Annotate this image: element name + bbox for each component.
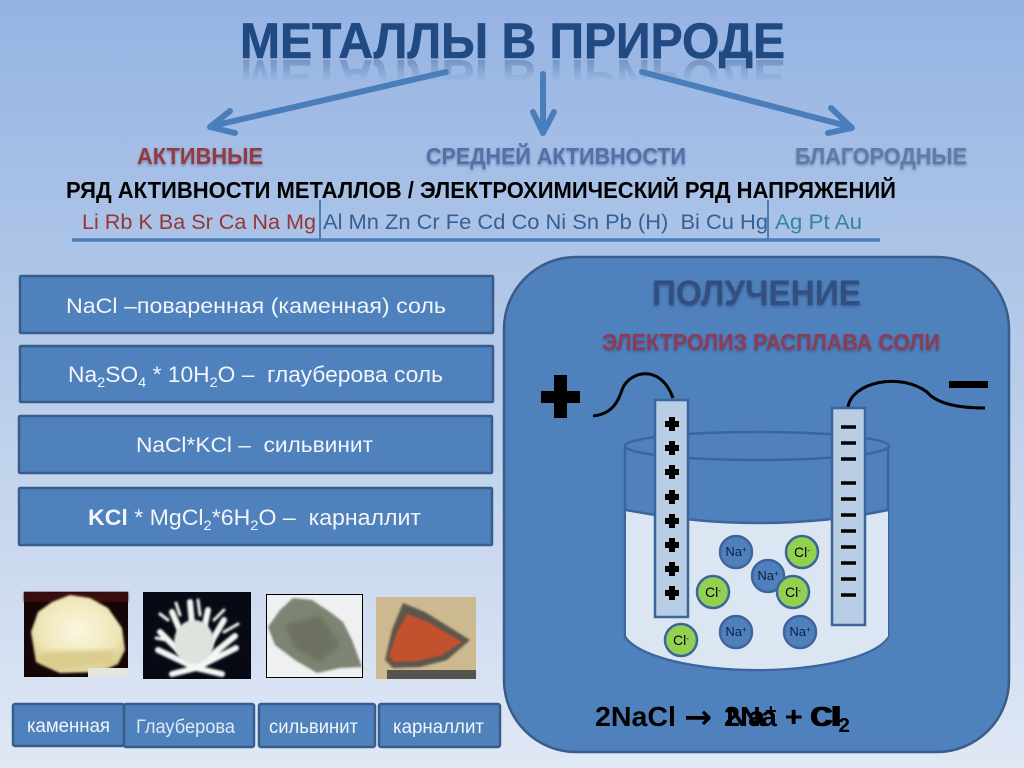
salt box: Glauber's salt xyxy=(20,346,493,402)
overlapping reaction equations xyxy=(595,698,850,737)
mineral label: sylvinite xyxy=(259,704,375,747)
salt box: carnallite: O – карналлит xyxy=(258,505,421,530)
cathode electrode xyxy=(832,408,865,625)
ion: chloride centre: Cl xyxy=(785,584,798,600)
anode electrode xyxy=(655,400,688,617)
ion: chloride: - xyxy=(807,546,810,555)
ion: sodium: + xyxy=(742,545,747,554)
ion: chloride left: - xyxy=(718,586,721,595)
salt box: rock salt: NaCl –поваренная (каменная) соль xyxy=(66,294,446,318)
salt box: Glauber's salt: * 10H xyxy=(146,362,210,387)
overlapping reaction equations: 2 xyxy=(839,715,850,737)
salt box: Glauber's salt: 2 xyxy=(97,374,105,390)
overlapping reaction equations: 2NaCl xyxy=(595,701,676,732)
heading: noble metals: БЛАГОРОДНЫЕ xyxy=(795,143,967,169)
ion: chloride bottom: Cl xyxy=(673,632,686,648)
salt box: Glauber's salt: SO xyxy=(105,362,138,387)
overlapping reaction equations: → xyxy=(684,698,712,736)
ion: sodium bottom right: + xyxy=(806,625,811,634)
mineral label: rock salt xyxy=(13,704,124,746)
ion: chloride: Cl xyxy=(794,544,807,560)
mineral label: sylvinite: сильвинит xyxy=(269,717,358,738)
ion: chloride xyxy=(786,536,818,568)
title: МЕТАЛЛЫ В ПРИРОДЕ xyxy=(240,13,785,69)
heading: medium activity metals: СРЕДНЕЙ АКТИВНОСТИ xyxy=(426,142,686,169)
panel: production by electrolysis xyxy=(504,257,1009,752)
salt box: sylvinite: NaCl*KCl – сильвинит xyxy=(136,433,373,457)
photo: rock salt xyxy=(24,592,128,677)
ion: sodium centre: Na xyxy=(757,568,774,583)
arrow: to noble metals xyxy=(642,72,852,133)
overlapping reaction equations: Na xyxy=(726,701,762,732)
mineral label: rock salt: каменная xyxy=(27,716,110,737)
ion: chloride left: Cl xyxy=(705,584,718,600)
salt box: Glauber's salt: O – глауберова соль xyxy=(218,362,443,387)
ion: sodium bottom left: + xyxy=(742,625,747,634)
salt box: sylvinite xyxy=(19,416,492,473)
activity series of metals: Li Rb K Ba Sr Ca Na Mg xyxy=(82,210,316,234)
photo: sylvinite xyxy=(266,594,362,678)
activity series of metals: Al Mn Zn Cr Fe Cd Co Ni Sn Pb (H) Bi Cu Hg xyxy=(323,210,768,234)
salt box: carnallite: 2 xyxy=(204,517,212,533)
salt box: Glauber's salt: 2 xyxy=(210,374,218,390)
wire: anode xyxy=(593,374,673,416)
salt box: Glauber's salt: 4 xyxy=(138,374,146,390)
overlapping reaction equations: + Cl xyxy=(777,701,842,732)
activity series of metals: Ag Pt Au xyxy=(775,210,862,234)
mineral label: carnallite xyxy=(379,704,500,747)
overlapping reaction equations: + xyxy=(765,701,777,721)
ion: chloride left xyxy=(697,576,729,608)
overlapping reaction equations: 2Na + Cl xyxy=(724,701,835,732)
ion: chloride bottom xyxy=(665,624,697,656)
arrow: to medium-activity metals xyxy=(533,74,554,133)
subheading: molten salt electrolysis: ЭЛЕКТРОЛИЗ РАСПЛАВА СОЛИ xyxy=(602,329,940,355)
title: МЕТАЛЛЫ В ПРИРОДЕ xyxy=(240,49,785,105)
beaker xyxy=(625,432,889,670)
ion: sodium bottom left xyxy=(720,616,752,648)
salt box: carnallite: *6H xyxy=(212,505,250,530)
ion: chloride centre xyxy=(777,576,809,608)
ion: chloride centre: - xyxy=(798,586,801,595)
salt box: carnallite xyxy=(19,488,492,545)
ion: sodium bottom right xyxy=(784,616,816,648)
ion: sodium: Na xyxy=(725,544,742,559)
ion: sodium bottom right: Na xyxy=(789,624,806,639)
salt box: carnallite: KCl * MgCl xyxy=(88,505,200,530)
heading: activity series: РЯД АКТИВНОСТИ МЕТАЛЛОВ / ЭЛЕКТРОХИМИЧЕСКИЙ РЯД НАПРЯЖЕНИЙ xyxy=(66,176,896,203)
ion: sodium centre: + xyxy=(774,569,779,578)
salt box: rock salt xyxy=(20,276,493,333)
mineral label: carnallite: карналлит xyxy=(393,717,484,738)
heading: active metals: АКТИВНЫЕ xyxy=(137,143,263,169)
photo: carnallite xyxy=(376,597,476,679)
ion: sodium bottom left: Na xyxy=(725,624,742,639)
mineral label: Glauber's salt xyxy=(124,704,254,747)
title xyxy=(240,13,785,105)
photo: Glauber's salt xyxy=(143,592,251,679)
arrow: to active metals xyxy=(210,72,446,133)
ion: sodium xyxy=(720,536,752,568)
ion: chloride bottom: - xyxy=(686,634,689,643)
ion: sodium centre xyxy=(752,560,784,592)
icon: minus terminal xyxy=(949,381,988,388)
wire: cathode xyxy=(848,381,985,408)
salt box: carnallite: 2 xyxy=(250,517,259,533)
heading: production: ПОЛУЧЕНИЕ xyxy=(652,274,861,313)
mineral label: Glauber's salt: Глауберова xyxy=(136,717,235,738)
icon: plus terminal xyxy=(541,375,580,418)
activity series of metals xyxy=(72,200,880,240)
salt box: Glauber's salt: Na xyxy=(68,362,96,387)
ions in melt xyxy=(665,536,818,656)
